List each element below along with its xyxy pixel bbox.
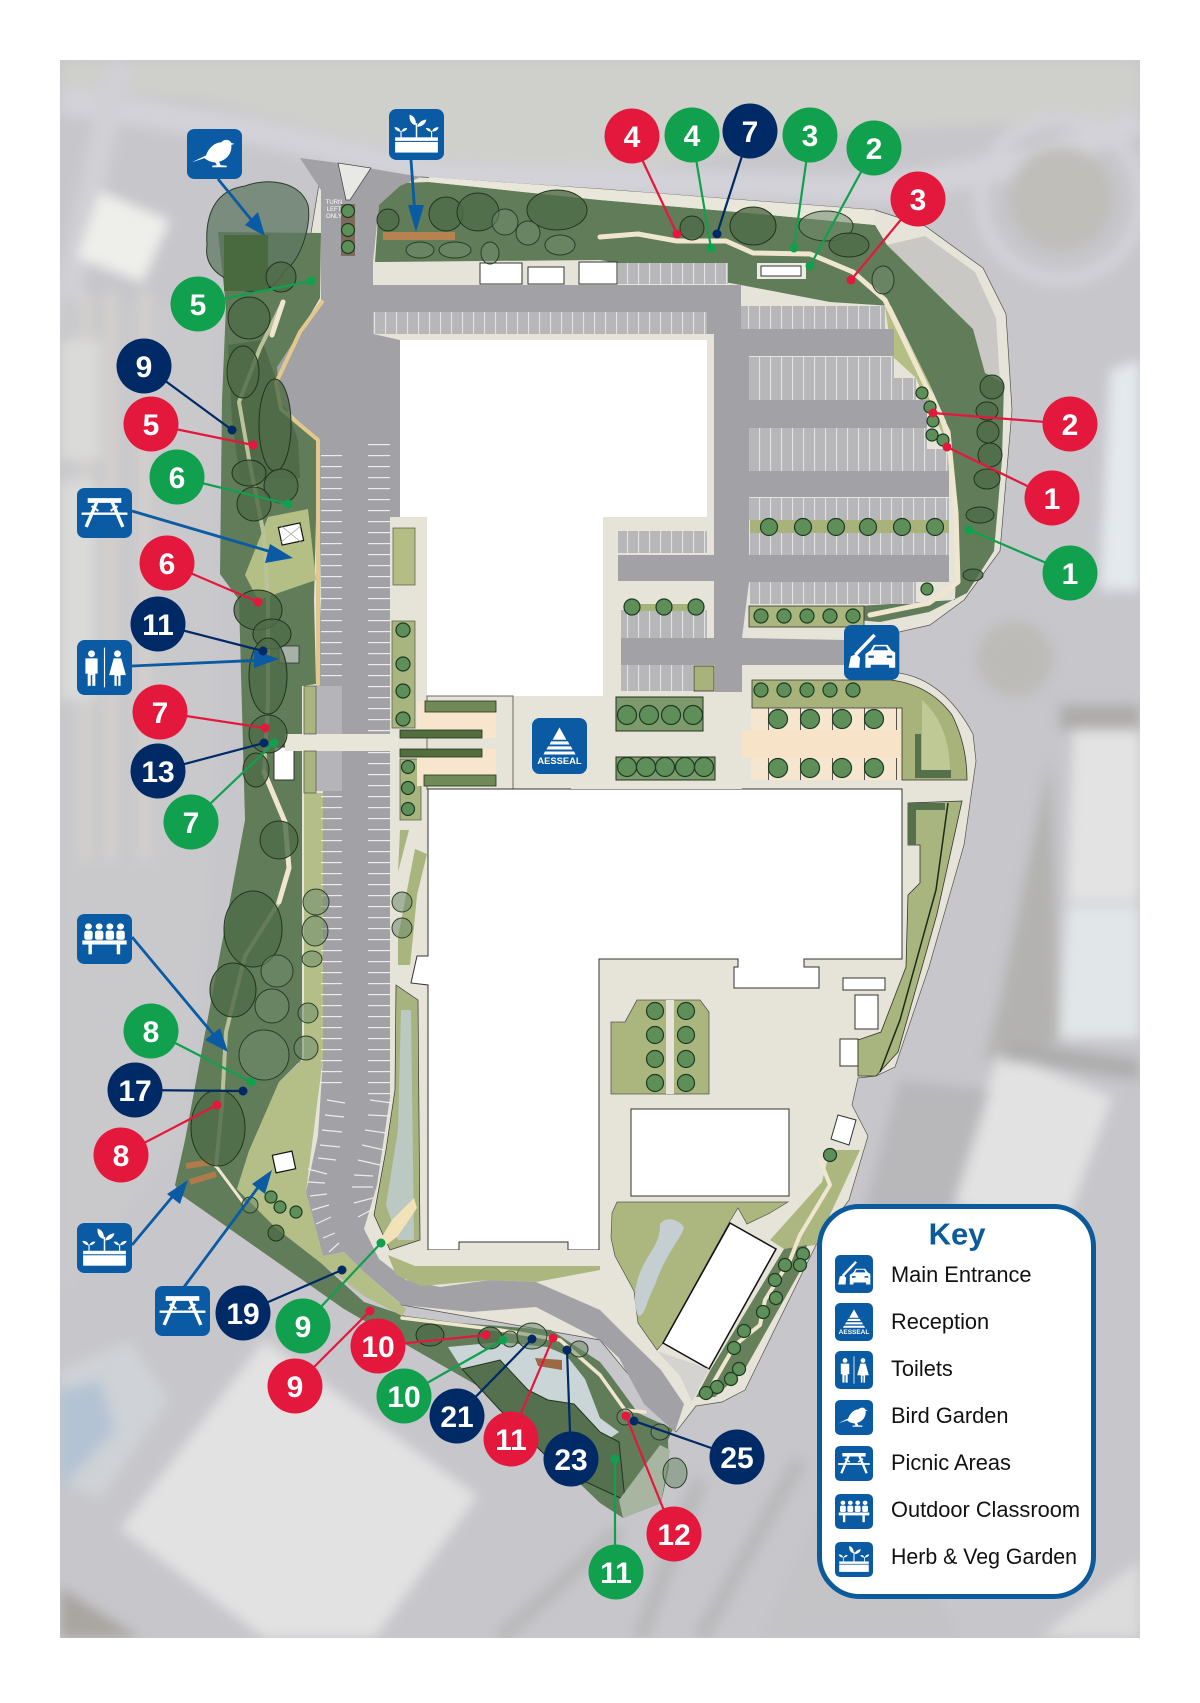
arrow: outdoor classroom xyxy=(132,937,228,1052)
icon: main entrance xyxy=(844,625,899,680)
marker: navy 13: 13 xyxy=(141,756,175,789)
marker: green 1 xyxy=(965,526,1098,600)
icon: herb garden south xyxy=(77,1223,132,1273)
building white blocks xyxy=(274,262,902,1250)
road network xyxy=(277,158,949,1432)
marker: red 8 xyxy=(94,1101,221,1182)
icon: picnic area north xyxy=(77,488,132,538)
garden furniture and pavilions xyxy=(186,163,455,1182)
courtyard tree planter xyxy=(611,1000,709,1094)
key row: picnic areas: Picnic Areas xyxy=(891,1450,1011,1475)
marker: green 2 xyxy=(806,120,902,270)
marker: green 6: 6 xyxy=(169,462,185,495)
key row: main entrance: Main Entrance xyxy=(891,1262,1032,1287)
marker: green 8 xyxy=(124,1004,255,1086)
marker: red 2 xyxy=(929,396,1098,452)
marker: red 4 xyxy=(604,108,681,238)
marker: red 2: 2 xyxy=(1062,409,1078,442)
panel: key xyxy=(820,1206,1094,1596)
marker: red 12: 12 xyxy=(657,1519,691,1552)
marker: green 4: 4 xyxy=(684,120,701,153)
marker: green 10: 10 xyxy=(387,1381,421,1414)
marker: green 9: 9 xyxy=(295,1311,311,1344)
marker: navy 9: 9 xyxy=(136,351,152,384)
marker: red 9 xyxy=(268,1307,374,1414)
top-left bird garden canopy xyxy=(207,182,309,292)
marker: red 9: 9 xyxy=(287,1371,303,1404)
marker: red 3 xyxy=(847,172,946,284)
key row: reception xyxy=(835,1303,989,1341)
south garden lawn and pond xyxy=(374,985,860,1518)
key row: bird garden: Bird Garden xyxy=(891,1403,1009,1428)
marker: red 1: 1 xyxy=(1044,483,1060,516)
key row: outdoor classroom xyxy=(835,1494,1080,1529)
arrow: toilets xyxy=(132,650,279,668)
north cream paving strip xyxy=(429,177,875,225)
dark planting mass west xyxy=(228,340,300,480)
marker: red 10 xyxy=(350,1318,490,1374)
marker: navy 21 xyxy=(430,1335,536,1444)
marker: green 7 xyxy=(164,739,278,850)
marker: red 12 xyxy=(622,1412,702,1562)
site base paving xyxy=(300,172,1012,1432)
marker: red 11 xyxy=(484,1334,557,1466)
key row: main entrance xyxy=(835,1255,1032,1293)
marker: red 5: 5 xyxy=(143,409,159,442)
west planting belt xyxy=(175,232,673,1518)
marker: green 3 xyxy=(782,108,838,252)
icon: toilets xyxy=(77,640,132,695)
marker: green 4 xyxy=(664,108,720,252)
marker: green 11 xyxy=(588,1455,644,1600)
marker: red 1 xyxy=(943,443,1080,526)
marker: navy 23: 23 xyxy=(554,1444,588,1477)
marker: red 3: 3 xyxy=(910,184,926,217)
grey verge north-east xyxy=(887,236,1000,383)
key row: reception: Reception xyxy=(891,1309,989,1334)
marker: navy 19 xyxy=(216,1266,346,1340)
key row: toilets: Toilets xyxy=(891,1356,953,1381)
icon: herb garden north xyxy=(389,109,444,160)
marker: red 7 xyxy=(132,684,269,740)
parking stalls xyxy=(308,263,949,1252)
marker: navy 25 xyxy=(630,1417,764,1484)
picnic lawn xyxy=(245,509,316,600)
marker: red 11: 11 xyxy=(495,1424,527,1457)
key row: herb and veg garden: Herb & Veg Garden xyxy=(891,1544,1077,1569)
marker: green 2: 2 xyxy=(866,133,882,166)
arrow: herb garden north xyxy=(408,160,424,232)
marker: red 7: 7 xyxy=(152,697,168,730)
arrow: herb garden south xyxy=(132,1180,188,1245)
marker: navy 23 xyxy=(544,1346,598,1486)
key row: picnic areas xyxy=(835,1446,1011,1481)
marker: navy 25: 25 xyxy=(720,1442,754,1475)
marker: navy 7: 7 xyxy=(742,116,758,149)
marker: green 3: 3 xyxy=(802,120,818,153)
marker: red 6: 6 xyxy=(159,548,175,581)
marker: navy 11: 11 xyxy=(142,609,174,642)
key heading: Key xyxy=(929,1216,986,1252)
marker: navy 17 xyxy=(108,1062,247,1118)
marker: green 8: 8 xyxy=(143,1016,159,1049)
marker: red 6 xyxy=(140,536,262,606)
marker: red 4: 4 xyxy=(624,121,641,154)
icon: picnic area south xyxy=(155,1286,210,1336)
key row: herb and veg garden xyxy=(835,1542,1077,1577)
marker: green 7: 7 xyxy=(183,807,199,840)
marker: red 5 xyxy=(124,396,257,452)
marker: navy 11 xyxy=(130,596,267,655)
reception planters xyxy=(571,520,967,1076)
garden furniture and pavilions: TURN xyxy=(326,200,342,206)
olive lawn along west car park xyxy=(237,793,406,1316)
west building forecourt planters xyxy=(285,528,496,965)
marker: navy 21: 21 xyxy=(440,1401,474,1434)
marker: green 11: 11 xyxy=(600,1557,632,1590)
marker: navy 17: 17 xyxy=(118,1075,152,1108)
icon: outdoor classroom xyxy=(77,914,132,964)
marker: green 5 xyxy=(170,276,315,332)
key row: outdoor classroom: Outdoor Classroom xyxy=(891,1497,1080,1522)
key row: toilets xyxy=(835,1351,953,1389)
marker: red 10: 10 xyxy=(361,1331,395,1364)
trees and planting canopy xyxy=(191,190,1004,1488)
marker: navy 9 xyxy=(116,338,236,434)
icon: bird garden xyxy=(187,129,242,179)
marker: green 1: 1 xyxy=(1062,558,1078,591)
garden furniture and pavilions: LEFT xyxy=(327,207,342,213)
cream footpaths xyxy=(216,234,958,1412)
marker: navy 19: 19 xyxy=(226,1298,260,1331)
marker: green 5: 5 xyxy=(190,289,206,322)
olive wedge beside car park xyxy=(885,306,946,440)
north and east planting belt xyxy=(375,182,1004,622)
marker: green 10 xyxy=(376,1336,507,1424)
marker: red 8: 8 xyxy=(113,1140,129,1173)
garden furniture and pavilions: ONLY xyxy=(326,214,342,220)
key row: bird garden xyxy=(835,1400,1009,1435)
marker: green 9 xyxy=(276,1239,385,1354)
marker: navy 13 xyxy=(130,739,268,798)
arrow: bird garden xyxy=(218,179,265,236)
marker: navy 7 xyxy=(713,104,778,238)
formal car park trees xyxy=(265,204,949,1400)
icon: reception xyxy=(532,718,587,774)
arrow: picnic area north xyxy=(132,511,293,563)
arrow: picnic area south xyxy=(184,1170,272,1287)
marker: green 6 xyxy=(150,450,292,508)
